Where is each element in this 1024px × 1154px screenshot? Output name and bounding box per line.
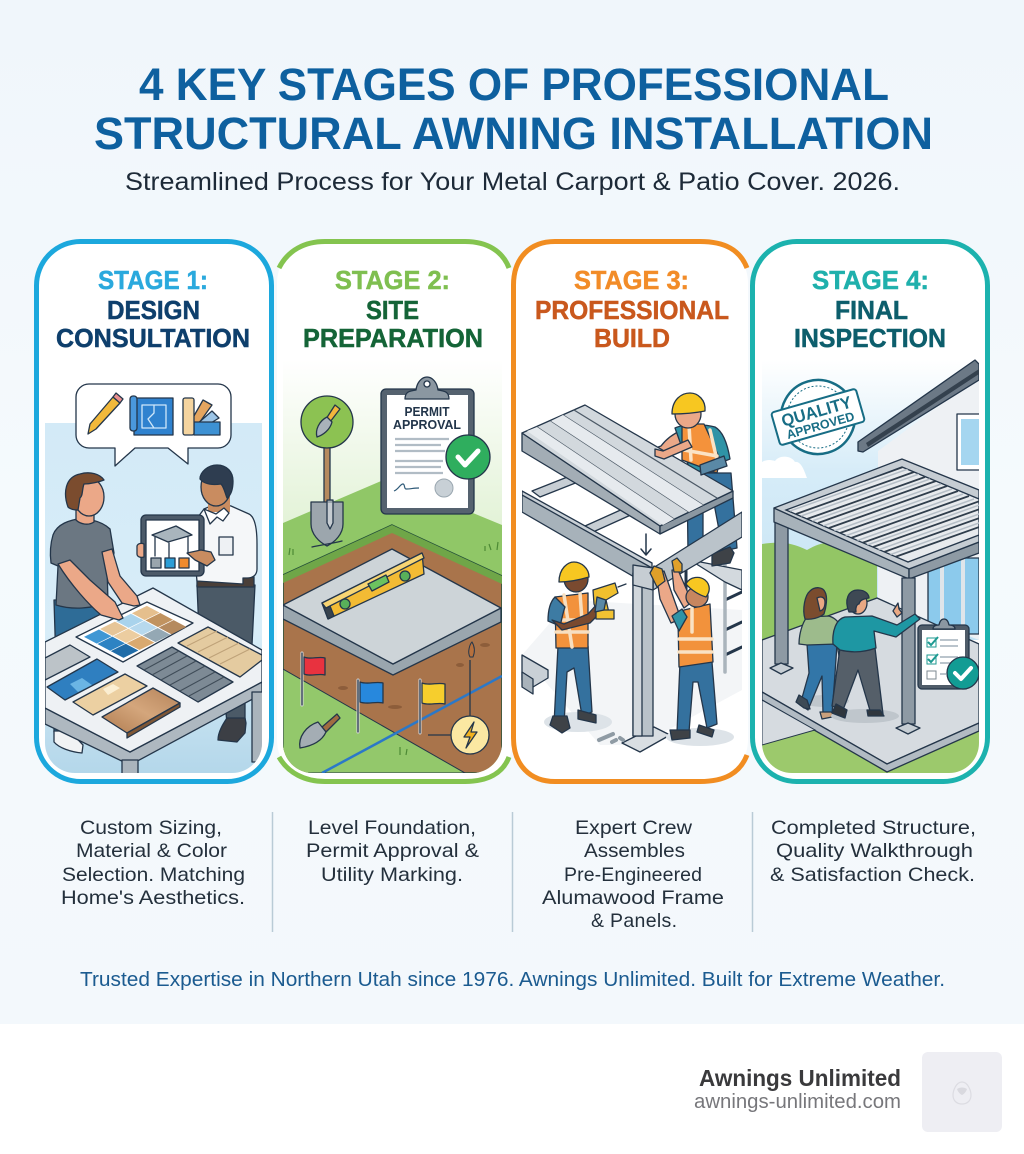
title: STRUCTURAL AWNING INSTALLATION [94, 108, 933, 159]
heading: stage 4 [794, 265, 946, 353]
tagline: Trusted Expertise in Northern Utah since 1976. Awnings Unlimited. Built for Extreme Weather. [80, 969, 945, 991]
description: stage 3: Assembles [584, 840, 685, 862]
description: stage 2: Utility Marking. [321, 864, 463, 886]
heading: stage 2: SITE [366, 295, 419, 325]
clipboard: permit approval [381, 377, 490, 514]
description: stage 1: Material & Color [76, 840, 228, 862]
icon: pencil [88, 393, 123, 434]
frame and post [622, 512, 742, 752]
lumber and bolts [522, 655, 623, 742]
icon: utility marker [428, 642, 489, 754]
description: stage 4 [770, 817, 976, 886]
heading: stage 4: INSPECTION [794, 323, 946, 353]
illustration: design consultation [45, 423, 263, 776]
heading: stage 4: FINAL [835, 295, 908, 325]
posts [770, 521, 793, 674]
description: stage 2 [306, 817, 479, 886]
description: stage 1: Selection. Matching [62, 864, 245, 886]
roof panel [522, 405, 733, 534]
clipboard: permit approval: PERMIT [404, 405, 450, 419]
heading: stage 4: STAGE 4: [812, 265, 929, 295]
heading: stage 1 [56, 265, 250, 353]
pergola roof [773, 458, 979, 735]
illustration: professional build [522, 474, 742, 745]
heading: stage 2: PREPARATION [303, 323, 483, 353]
description: stage 3: Pre-Engineered [564, 864, 702, 886]
stamp: quality approved [766, 369, 870, 465]
title: 4 KEY STAGES OF PROFESSIONAL [139, 59, 889, 110]
heading: stage 2: STAGE 2: [335, 265, 450, 295]
icon: trowel [300, 714, 340, 748]
panel: stage 1 design consultation [36, 242, 272, 782]
description: stage 1 [61, 817, 245, 909]
footer brand name: Awnings Unlimited [699, 1065, 901, 1091]
worker on scaffold [650, 393, 737, 566]
worker with drill [544, 562, 626, 733]
icon: color fan [183, 398, 220, 435]
table with material samples [45, 588, 263, 776]
color swatch sheet [76, 602, 193, 662]
illustration: site preparation [283, 360, 502, 773]
description: stage 2: Level Foundation, [308, 817, 476, 839]
stamp: quality approved: APPROVED [785, 409, 856, 442]
heading: stage 1: STAGE 1: [98, 265, 208, 295]
panel border: stage 2 [279, 242, 509, 782]
footer url: awnings-unlimited.com [694, 1091, 901, 1113]
description: stage 4: Quality Walkthrough [776, 840, 973, 862]
description: stage 1: Custom Sizing, [80, 817, 222, 839]
panel: stage 2 site preparation [277, 241, 513, 782]
person: woman [796, 588, 849, 719]
description: stage 3: Alumawood Frame [542, 887, 724, 909]
beams [522, 474, 652, 585]
icon: shovel sign [301, 396, 353, 547]
worker lifting beam [650, 558, 734, 746]
description: stage 3: Expert Crew [575, 817, 693, 839]
icon: blueprint [130, 396, 173, 435]
arms holding panel [655, 440, 727, 475]
heading: stage 1: CONSULTATION [56, 323, 250, 353]
tablet [137, 515, 215, 576]
person: client left [50, 473, 120, 753]
icon: spirit level [322, 553, 424, 619]
marker flags [302, 653, 445, 733]
heading: stage 2 [303, 265, 483, 353]
description: stage 4: Completed Structure, [771, 817, 976, 839]
logo placeholder [922, 1052, 1002, 1132]
description: stage 3 [542, 817, 724, 932]
clipboard with checklist [918, 619, 979, 689]
description: stage 2: Permit Approval & [306, 840, 479, 862]
description: stage 1: Home's Aesthetics. [61, 887, 245, 909]
panel border: stage 3 [514, 242, 747, 782]
heading: stage 3: BUILD [594, 323, 670, 353]
scaffold [686, 552, 742, 672]
stamp: quality approved: QUALITY [779, 392, 854, 431]
heading: stage 3: PROFESSIONAL [535, 295, 729, 325]
description: stage 4: & Satisfaction Check. [770, 864, 975, 886]
heading: stage 3 [535, 265, 729, 353]
illustration: final inspection [762, 359, 979, 773]
description: stage 3: & Panels. [591, 910, 677, 932]
person: man pointing [831, 590, 920, 723]
heading: stage 3: STAGE 3: [574, 265, 689, 295]
title [94, 59, 933, 159]
speech bubble with icons [76, 384, 231, 466]
person: designer right [195, 465, 257, 742]
heading: stage 1: DESIGN [107, 295, 200, 325]
client arms on table [58, 549, 140, 620]
clipboard: permit approval: APPROVAL [393, 418, 461, 432]
subtitle: Streamlined Process for Your Metal Carport & Patio Cover. 2026. [125, 168, 900, 196]
panel: stage 3 professional build [513, 241, 748, 782]
panel: stage 4 final inspection [752, 242, 1013, 782]
